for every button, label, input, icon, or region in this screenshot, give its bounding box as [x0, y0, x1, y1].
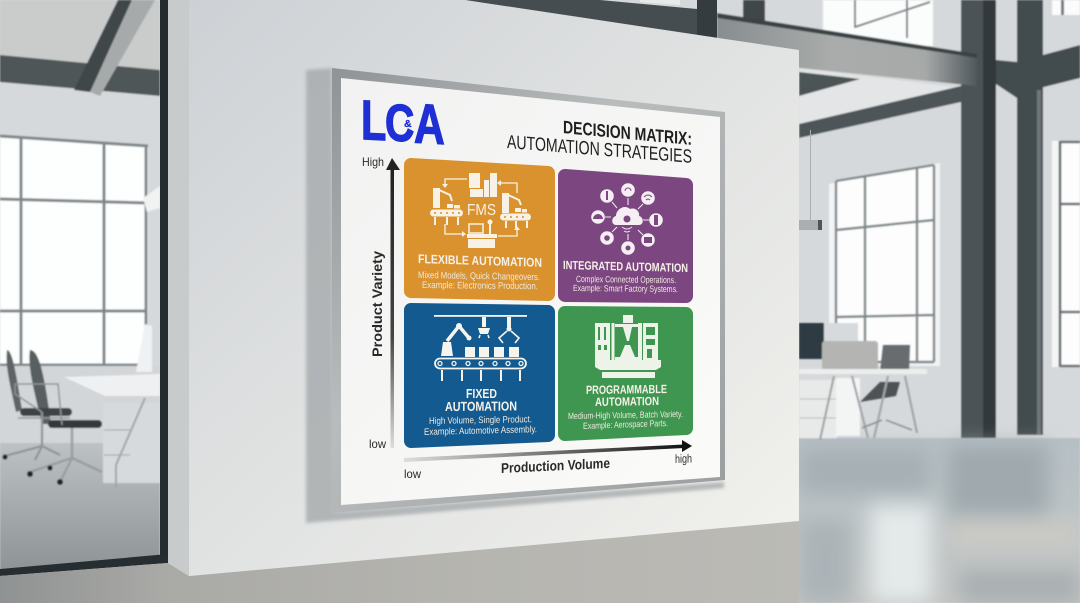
logo: &: [404, 118, 412, 130]
axis high label: High: [362, 155, 384, 169]
left-room lower wall: [0, 366, 160, 444]
panel heading line 1: PROGRAMMABLE: [586, 382, 667, 397]
flow arrows: [445, 179, 517, 236]
back pillar above beam: [743, 0, 765, 22]
foreground floor: [0, 521, 799, 603]
ceiling: [799, 68, 961, 136]
poster panel: [341, 78, 720, 505]
panel description line 2: Example: Electronics Production.: [422, 280, 538, 292]
panel description line 1: Mixed Models, Quick Changeovers.: [418, 270, 540, 283]
upper window: [823, 0, 1080, 46]
panel description line 2: Example: Aerospace Parts.: [583, 418, 668, 431]
axis arrow: [386, 158, 400, 448]
panel heading line 2: AUTOMATION: [445, 398, 517, 414]
axis low label: low: [369, 437, 386, 451]
pendant lamp: [143, 186, 160, 212]
panel description line 1: Complex Connected Operations.: [576, 274, 676, 285]
vertical axis: product variety: [362, 155, 400, 451]
icon: fixed assembly line: [434, 315, 527, 381]
axis title: Production Volume: [501, 455, 610, 476]
panel: fixed automation: [411, 310, 548, 441]
right-room lamp: [799, 130, 822, 230]
panel heading line 1: FIXED: [466, 386, 497, 401]
ceiling: [0, 0, 160, 70]
panel description line 2: Example: Smart Factory Systems.: [573, 283, 678, 294]
poster shadow: [306, 68, 724, 523]
panel description line 2: Example: Automotive Assembly.: [424, 424, 537, 438]
floor right: [780, 438, 1080, 603]
logo: L: [361, 89, 386, 153]
dark ceiling beam: [0, 55, 160, 96]
main steel beam: [717, 13, 977, 96]
panel: flexible automation: [411, 165, 548, 294]
cross beam: [996, 45, 1080, 98]
logo: [361, 89, 445, 156]
background: right room: [690, 0, 1080, 603]
gripper two: [499, 317, 519, 343]
boxes: [465, 347, 519, 357]
left-room floor: [0, 443, 160, 570]
office chairs: [2, 350, 102, 485]
beam above wall: [465, 0, 717, 38]
axis low label: low: [404, 467, 421, 481]
icon: flexible manufacturing system: FMS: [467, 202, 496, 219]
diagonal ceiling beam: [74, 0, 155, 96]
title: AUTOMATION STRATEGIES: [507, 132, 692, 168]
panel: integrated automation: [563, 176, 688, 296]
display wall: [168, 0, 799, 576]
horizontal axis: production volume: [404, 440, 692, 481]
axis arrow: [404, 440, 692, 462]
top machine: [469, 173, 497, 197]
right-room desks and chair: [799, 323, 927, 440]
icon: connected cloud: [591, 183, 663, 255]
left-room window: [0, 136, 148, 365]
poster frame: [332, 68, 725, 513]
steel pillar: [957, 0, 1000, 443]
robot arm: [441, 323, 472, 356]
floor reflections: [800, 445, 1080, 603]
axis high label: high: [675, 451, 692, 466]
panel: programmable automation: [565, 313, 686, 434]
rear steel pillar: [1017, 0, 1043, 435]
panel heading: INTEGRATED AUTOMATION: [563, 258, 688, 275]
icon: cnc machine: [595, 315, 661, 378]
title: DECISION MATRIX:: [563, 117, 692, 149]
panel description line 1: High Volume, Single Product.: [429, 414, 532, 427]
gripper one: [478, 317, 490, 338]
far-right window: [1052, 141, 1080, 367]
axis title: Product Variety: [369, 251, 385, 357]
poster: [332, 68, 725, 513]
lower ceiling beam: [799, 86, 961, 138]
glass partition frame: [0, 0, 168, 576]
legs: [441, 370, 521, 381]
background: left room: [0, 0, 168, 575]
panel heading: FLEXIBLE AUTOMATION: [418, 252, 542, 270]
desk: [64, 324, 160, 488]
left robot cell: [430, 188, 463, 225]
bottom workstation: [467, 220, 497, 248]
panel heading line 2: AUTOMATION: [595, 394, 659, 409]
logo: A: [414, 92, 445, 156]
right robot cell: [500, 193, 531, 228]
panel description line 1: Medium-High Volume, Batch Variety.: [568, 409, 683, 421]
conveyor: [435, 358, 526, 368]
logo: C: [385, 93, 414, 153]
right-room window: [829, 163, 940, 366]
title: [507, 117, 692, 168]
